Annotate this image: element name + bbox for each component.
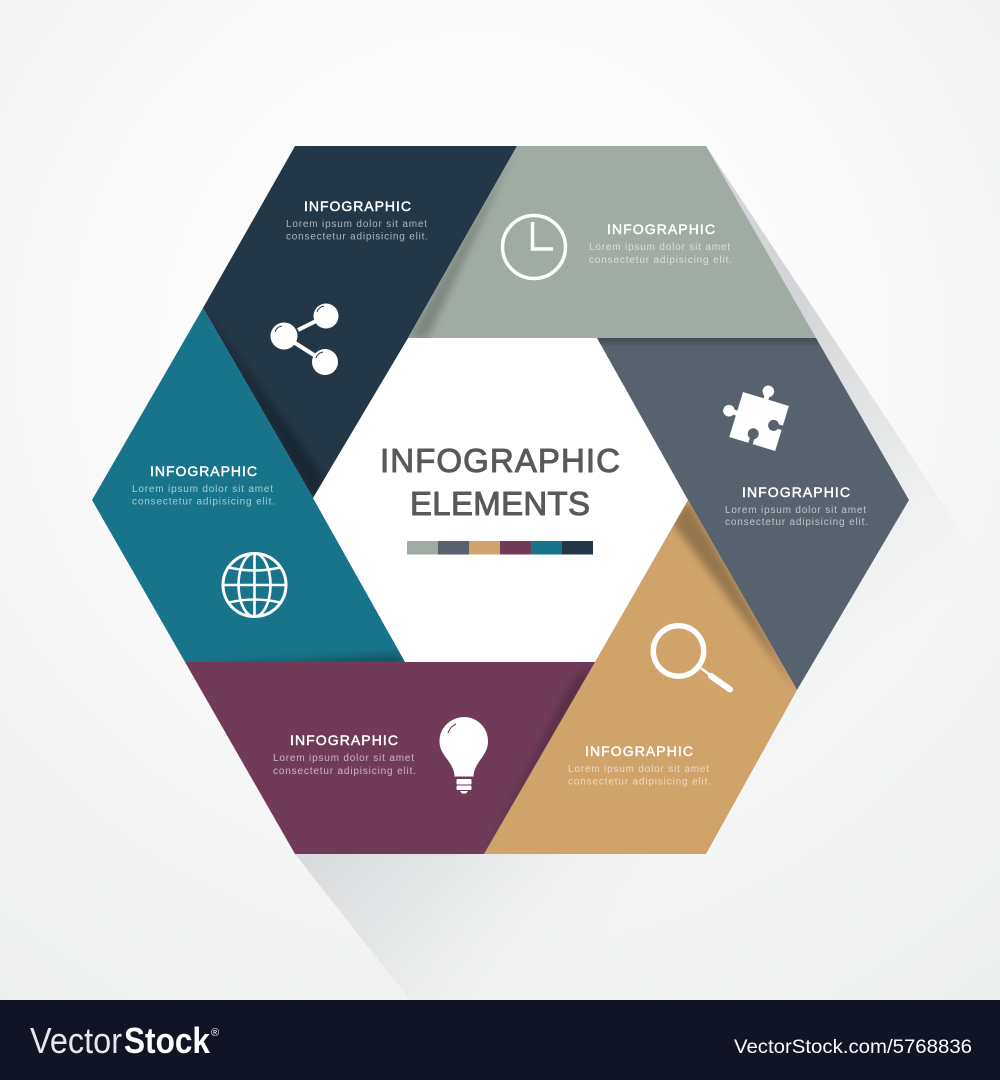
panel: sage clock segment <box>408 146 816 338</box>
logo wordmark <box>30 1020 219 1061</box>
text: teal line 1: Lorem ipsum dolor sit amet <box>132 484 273 495</box>
panel: plum bulb segment <box>185 662 595 854</box>
text: teal line 2: consectetur adipisicing elit. <box>132 496 275 508</box>
title line 1: INFOGRAPHIC <box>380 442 620 479</box>
panel: tan magnifier segment <box>484 500 797 854</box>
color palette bar <box>407 541 593 554</box>
central white hexagon <box>313 338 688 662</box>
footer band <box>0 1000 1000 1080</box>
text: sage line 1: Lorem ipsum dolor sit amet <box>589 242 730 253</box>
heading: teal: INFOGRAPHIC <box>150 463 257 479</box>
long shadow of hexagon <box>295 146 1000 1000</box>
heading: slate: INFOGRAPHIC <box>742 484 850 500</box>
text: sage line 2: consectetur adipisicing elit. <box>589 255 732 266</box>
text: navy line 2: consectetur adipisicing elit. <box>286 232 428 242</box>
text: slate line 2: consectetur adipisicing elit. <box>725 517 868 528</box>
heading: plum: INFOGRAPHIC <box>290 732 398 748</box>
footer url: VectorStock.com/5768836 <box>734 1036 972 1058</box>
heading: sage: INFOGRAPHIC <box>607 221 715 237</box>
title line 2: ELEMENTS <box>410 485 590 522</box>
center title <box>380 442 620 522</box>
text: navy line 1: Lorem ipsum dolor sit amet <box>286 219 427 230</box>
logo wordmark: Stock <box>124 1020 211 1061</box>
text: tan line 2: consectetur adipisicing elit. <box>568 776 711 788</box>
text: plum line 1: Lorem ipsum dolor sit amet <box>273 753 414 764</box>
logo wordmark: Vector <box>30 1020 122 1061</box>
logo wordmark: ® <box>211 1027 219 1039</box>
icon: puzzle piece <box>716 375 794 452</box>
icon: light bulb <box>440 717 488 794</box>
panel: teal globe segment <box>92 308 405 666</box>
heading: tan: INFOGRAPHIC <box>585 743 693 759</box>
icon: magnifier <box>653 626 730 690</box>
text: tan line 1: Lorem ipsum dolor sit amet <box>568 764 709 775</box>
icon: share <box>270 304 338 375</box>
icon: globe <box>223 554 286 616</box>
panel: navy share segment <box>203 146 517 498</box>
text: slate line 1: Lorem ipsum dolor sit amet <box>725 505 866 516</box>
heading: navy: INFOGRAPHIC <box>304 198 411 214</box>
icon: clock <box>502 216 566 278</box>
panel: slate puzzle segment <box>590 330 909 690</box>
text: plum line 2: consectetur adipisicing elit. <box>273 766 416 777</box>
